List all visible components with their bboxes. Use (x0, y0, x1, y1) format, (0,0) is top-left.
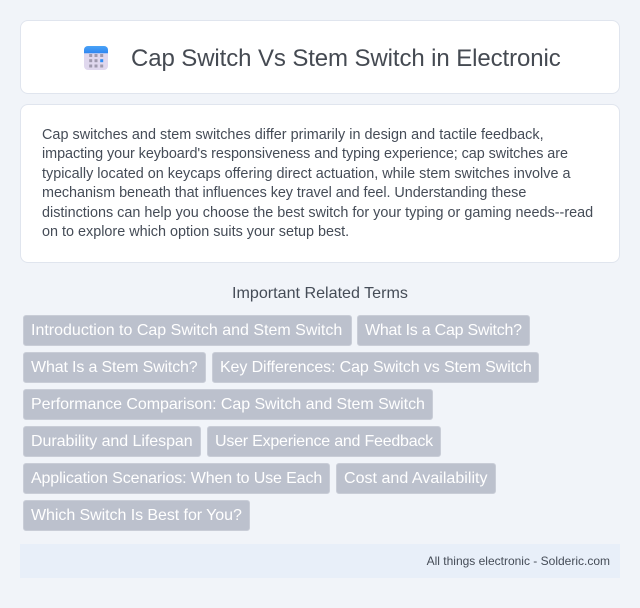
tag: cap switch: What Is a Cap Switch? (365, 322, 522, 339)
tag: cost: Cost and Availability (344, 470, 488, 487)
tag: stem switch: What Is a Stem Switch? (31, 359, 198, 376)
tag: key differences (212, 352, 538, 382)
intro text: on to explore which option suits your setup best. (42, 224, 349, 240)
tag: user experience: User Experience and Feedback (215, 433, 433, 450)
intro text: mechanism beneath that influences key travel and feel. Understanding these (42, 185, 526, 201)
intro text: Cap switches and stem switches differ primarily in design and tactile feedback, (42, 127, 544, 143)
tag: key differences: Key Differences: Cap Switch vs Stem Switch (220, 359, 532, 376)
related terms heading: Important Related Terms (232, 284, 408, 302)
tag: durability: Durability and Lifespan (31, 433, 193, 450)
tag: best switch: Which Switch Is Best for You? (31, 507, 242, 524)
tag: introduction (23, 315, 352, 346)
tag: user experience (207, 426, 440, 456)
tag: application: Application Scenarios: When to Use Each (31, 470, 322, 487)
intro text: typically located on keycaps offering direct actuation, while stem switches involve a (42, 166, 571, 182)
icon: calendar keypad (84, 46, 108, 70)
intro text (42, 127, 593, 240)
intro text: distinctions can help you choose the best switch for your typing or gaming needs--read (42, 205, 593, 221)
tag: introduction: Introduction to Cap Switch and Stem Switch (31, 322, 342, 339)
title: Cap Switch Vs Stem Switch in Electronic (131, 45, 561, 72)
tag: cost (336, 463, 496, 494)
tag: stem switch (23, 352, 206, 382)
tag: best switch (23, 500, 250, 530)
tag: performance (23, 389, 432, 420)
tag: cap switch (357, 315, 530, 346)
footer credit: All things electronic - Solderic.com (427, 554, 610, 568)
intro text: impacting your keyboard's responsiveness and typing experience; cap switches are (42, 146, 568, 162)
header panel (20, 20, 620, 94)
tag: performance: Performance Comparison: Cap Switch and Stem Switch (31, 396, 425, 413)
tag: durability (23, 426, 200, 456)
footer bar (20, 544, 620, 578)
tag: application (23, 463, 330, 494)
intro text panel (20, 104, 620, 263)
